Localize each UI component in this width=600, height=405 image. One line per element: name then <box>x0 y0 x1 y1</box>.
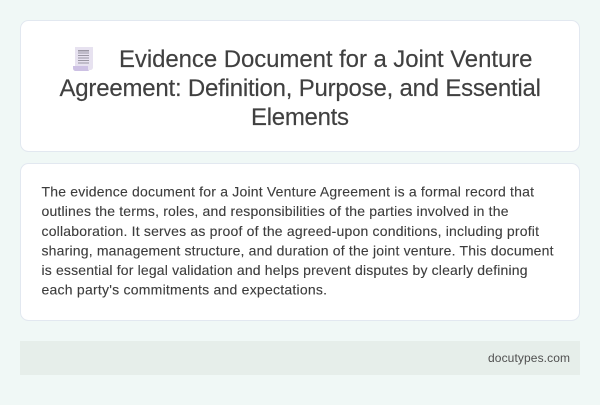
panel: title card <box>20 20 580 152</box>
text block: description: The evidence document for a Joint Venture Agreement is a formal record that <box>42 184 534 200</box>
text block: description <box>42 184 554 298</box>
text block: description: collaboration. It serves as proof of the agreed-upon conditions, including profit <box>42 223 539 239</box>
icon: document scroll <box>73 47 93 71</box>
panel: footer bar <box>20 341 580 375</box>
heading: Elements <box>251 104 349 131</box>
heading: Evidence Document for a Joint Venture <box>119 46 532 73</box>
footer source text: docutypes.com <box>488 351 570 365</box>
panel: description card <box>20 164 580 320</box>
heading: Agreement: Definition, Purpose, and Essential <box>60 75 541 102</box>
text block: description: sharing, management structure, and duration of the joint venture. This document <box>42 242 554 258</box>
text block: description: each party's commitments and expectations. <box>42 282 327 298</box>
text block: description: is essential for legal validation and helps prevent disputes by clearly defining <box>42 262 528 278</box>
text block: description: outlines the terms, roles, and responsibilities of the parties involved in the <box>42 203 509 219</box>
heading <box>60 46 541 131</box>
